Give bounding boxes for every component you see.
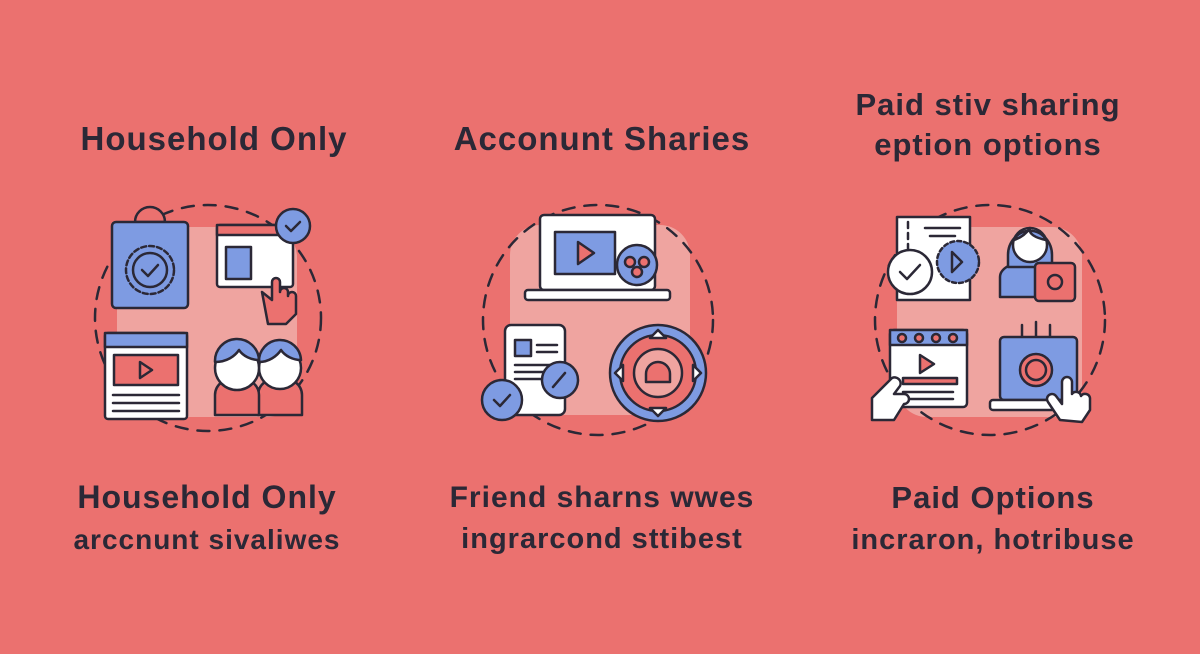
caption: friend sharing [450, 481, 754, 555]
icon group: account sharing [482, 205, 713, 435]
caption: friend sharing: Friend sharns wwes [450, 481, 754, 514]
caption: household only [73, 479, 340, 555]
caption: household only: arccnunt sivaliwes [73, 524, 340, 555]
caption: paid options: incraron, hotribuse [851, 524, 1135, 556]
caption: paid options [851, 480, 1135, 556]
caption: friend sharing: ingrarcond sttibest [461, 523, 743, 555]
title: paid sharing: eption options [874, 127, 1102, 162]
icon group: paid options [872, 205, 1105, 435]
icon group: household [95, 205, 321, 431]
title: account sharies: Acconunt Sharies [454, 120, 750, 157]
title: household only: Household Only [80, 120, 348, 157]
title: paid sharing: Paid stiv sharing [855, 87, 1121, 122]
title: paid sharing [855, 87, 1121, 162]
caption: paid options: Paid Options [891, 480, 1095, 515]
caption: household only: Household Only [77, 479, 337, 515]
